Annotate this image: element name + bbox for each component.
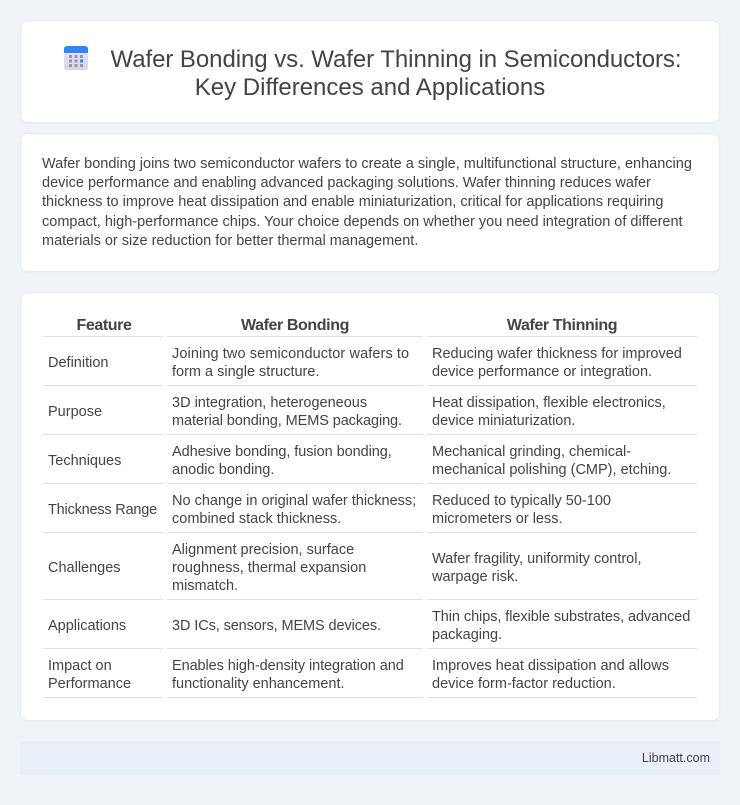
row: thickness range [43,493,697,533]
icon: calendar grid [64,46,88,70]
row: impact on performance: Impact on [48,658,112,674]
intro paragraph: compact, high-performance chips. Your choice depends on whether you need integration of different [42,214,683,230]
title heading: Key Differences and Applications [195,74,545,101]
table card [20,292,720,721]
row: challenges: Alignment precision, surface [172,542,354,558]
row: impact on performance: Enables high-density integration and [172,658,404,674]
row: definition: device performance or integration. [432,364,652,380]
row: applications: Thin chips, flexible substrates, advanced [432,609,690,625]
row: definition: Reducing wafer thickness for improved [432,346,682,362]
row: applications: 3D ICs, sensors, MEMS devices. [172,618,381,634]
header row: Wafer Bonding [241,317,349,334]
row: challenges: warpage risk. [432,569,518,585]
row: challenges [43,542,697,600]
row: techniques: Mechanical grinding, chemical- [432,444,631,460]
row: purpose: material bonding, MEMS packaging. [172,413,402,429]
row: challenges: roughness, thermal expansion [172,560,366,576]
row: thickness range: Thickness Range [48,502,157,518]
row: techniques: Adhesive bonding, fusion bonding, [172,444,392,460]
intro paragraph: thickness to improve heat dissipation and enable miniaturization, critical for applications requiring [42,194,663,210]
row: challenges: Wafer fragility, uniformity control, [432,551,642,567]
row: thickness range: micrometers or less. [432,511,563,527]
row: impact on performance: Performance [48,676,131,692]
row: definition: form a single structure. [172,364,319,380]
footer bar [20,741,720,775]
title heading [110,46,681,101]
header row: Wafer Thinning [507,317,617,334]
row: techniques: Techniques [48,453,121,469]
row: applications: packaging. [432,627,502,643]
row: techniques [43,444,697,484]
row: thickness range: combined stack thickness. [172,511,341,527]
row: impact on performance: Improves heat dissipation and allows [432,658,669,674]
row: definition: Definition [48,355,108,371]
title card [20,20,720,123]
row: purpose: 3D integration, heterogeneous [172,395,367,411]
row: thickness range: No change in original wafer thickness; [172,493,416,509]
intro paragraph [42,156,692,249]
row: purpose: Purpose [48,404,102,420]
row: impact on performance [43,658,697,698]
row: purpose: device miniaturization. [432,413,575,429]
row: challenges: mismatch. [172,578,238,594]
row: impact on performance: functionality enhancement. [172,676,344,692]
row: definition [43,346,697,386]
row: purpose: Heat dissipation, flexible electronics, [432,395,666,411]
intro card [20,133,720,272]
row: techniques: mechanical polishing (CMP), etching. [432,462,671,478]
row: applications [43,609,697,649]
comparison table [43,317,697,698]
intro paragraph: materials or size reduction for better thermal management. [42,233,418,249]
header row: Feature [76,317,132,334]
header row [43,317,697,337]
row: techniques: anodic bonding. [172,462,274,478]
footer credit: Libmatt.com [642,751,710,765]
row: purpose [43,395,697,435]
row: applications: Applications [48,618,126,634]
row: impact on performance: device form-factor reduction. [432,676,616,692]
row: challenges: Challenges [48,560,121,576]
intro paragraph: Wafer bonding joins two semiconductor wafers to create a single, multifunctional structure, enhancing [42,156,692,172]
title heading: Wafer Bonding vs. Wafer Thinning in Semiconductors: [110,46,681,73]
row: thickness range: Reduced to typically 50-100 [432,493,611,509]
row: definition: Joining two semiconductor wafers to [172,346,409,362]
intro paragraph: device performance and enabling advanced packaging solutions. Wafer thinning reduces wafer [42,175,651,191]
